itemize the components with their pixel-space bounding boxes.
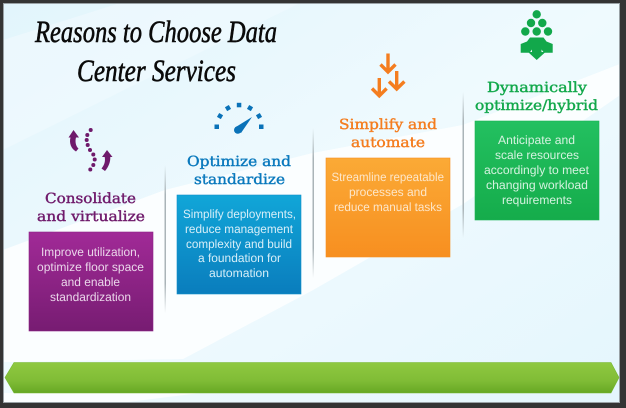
heading: dynamically optimize/hybrid [475,80,598,114]
orange text box [326,158,450,257]
green text box: Anticipate and [498,133,575,147]
purple text box: optimize floor space [37,260,144,274]
column: optimize and standardize [177,103,301,294]
column divider 3 [462,92,464,238]
green text box [475,121,599,220]
orange text box: processes and [349,185,427,199]
column: consolidate and virtualize [29,128,153,331]
column divider 1 [164,165,166,313]
icon: three down arrows [372,54,404,96]
icon: gauge [214,103,264,134]
column: dynamically optimize/hybrid [475,10,599,220]
heading: dynamically optimize/hybrid: optimize/hybrid [475,98,598,114]
heading: optimize and standardize [187,154,291,188]
heading: optimize and standardize: standardize [194,172,285,188]
blue text box: a foundation for [198,251,281,265]
heading: simplify and automate: automate [351,135,425,151]
green text box: scale resources [495,148,579,162]
blue text box: Simplify deployments, [183,207,296,221]
blue text box: reduce management [185,222,294,236]
heading: simplify and automate: Simplify and [339,117,437,133]
title [34,14,277,88]
orange text box: reduce manual tasks [334,200,442,214]
blue text box [177,195,301,294]
heading: simplify and automate [339,117,437,151]
heading: optimize and standardize: Optimize and [187,154,291,170]
purple text box [29,232,153,331]
blue text box: complexity and build [186,237,292,251]
purple text box: Improve utilization, [41,245,140,259]
green text box: accordingly to meet [484,163,590,177]
column divider 2 [312,128,314,278]
icon: consolidate arrows and dots [68,128,112,172]
blue text box: automation [209,266,269,280]
heading: consolidate and virtualize: and virtualize [37,209,145,225]
heading: consolidate and virtualize [37,191,145,225]
green text box: requirements [502,193,572,207]
purple text box: and enable [61,275,120,289]
orange text box: Streamline repeatable [332,170,444,184]
title: Reasons to Choose Data [34,14,277,49]
purple text box: standardization [50,290,131,304]
green text box: changing workload [486,178,588,192]
title: Center Services [77,53,236,88]
heading: consolidate and virtualize: Consolidate [45,191,136,207]
column: simplify and automate [326,54,450,257]
heading: dynamically optimize/hybrid: Dynamically [487,80,587,96]
icon: green circles and arrows [521,10,553,60]
green banner arrow [5,362,619,393]
